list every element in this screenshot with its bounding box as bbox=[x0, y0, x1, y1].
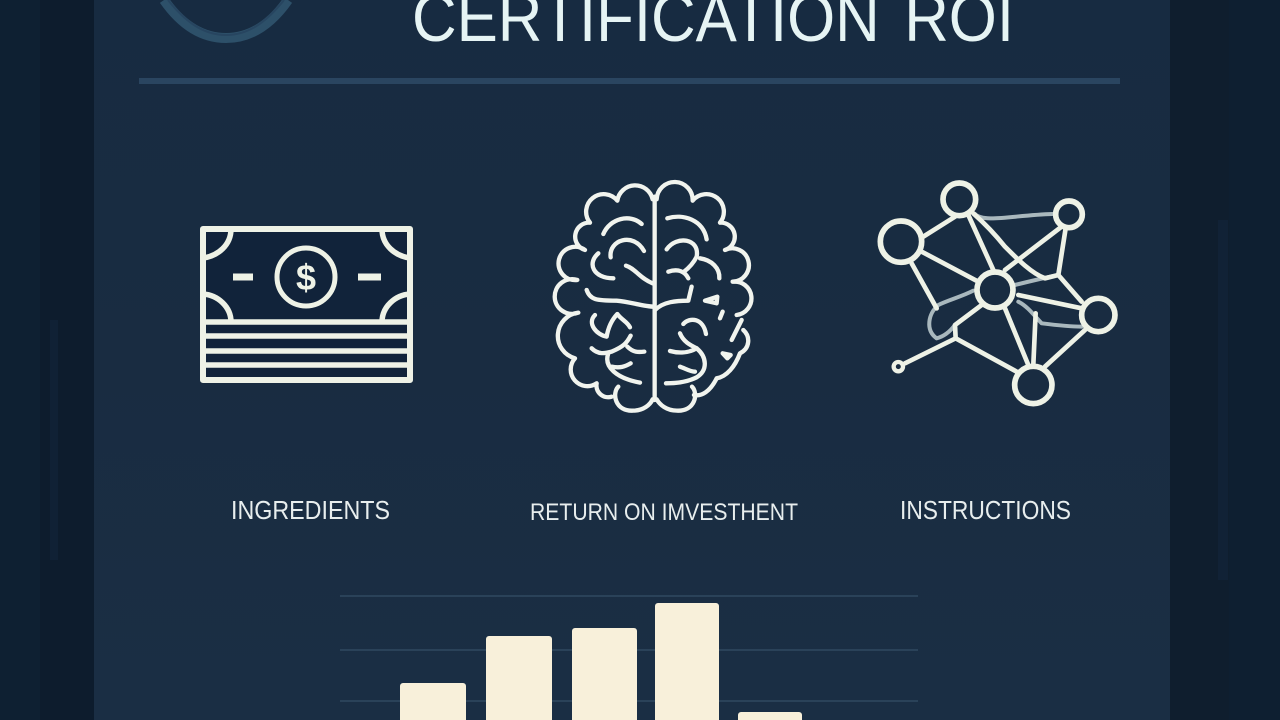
faded links bbox=[929, 214, 1082, 338]
label: ingredients: INGREDIENTS bbox=[231, 495, 390, 525]
bar 5 bbox=[738, 712, 802, 720]
nodes bbox=[880, 183, 1115, 404]
brain folds right bbox=[655, 217, 731, 383]
bar 3 bbox=[572, 628, 637, 720]
header divider bbox=[139, 78, 1120, 84]
bar 4 bbox=[655, 603, 719, 720]
icon: brain bbox=[555, 182, 751, 411]
brain outline bbox=[555, 182, 751, 411]
bar 1 bbox=[400, 683, 466, 720]
bar chart bbox=[340, 596, 918, 720]
label: return on investment: RETURN ON IMVESTHENT bbox=[530, 499, 798, 526]
icon: money stack: $ bbox=[296, 257, 316, 298]
solid links bbox=[905, 213, 1085, 372]
icon: money stack bbox=[203, 229, 410, 380]
bar 2 bbox=[486, 636, 552, 720]
label: instructions: INSTRUCTIONS bbox=[900, 495, 1071, 525]
brain folds left bbox=[587, 218, 654, 383]
icon: emblem ring bbox=[164, 0, 288, 38]
icon: network bbox=[880, 183, 1115, 404]
